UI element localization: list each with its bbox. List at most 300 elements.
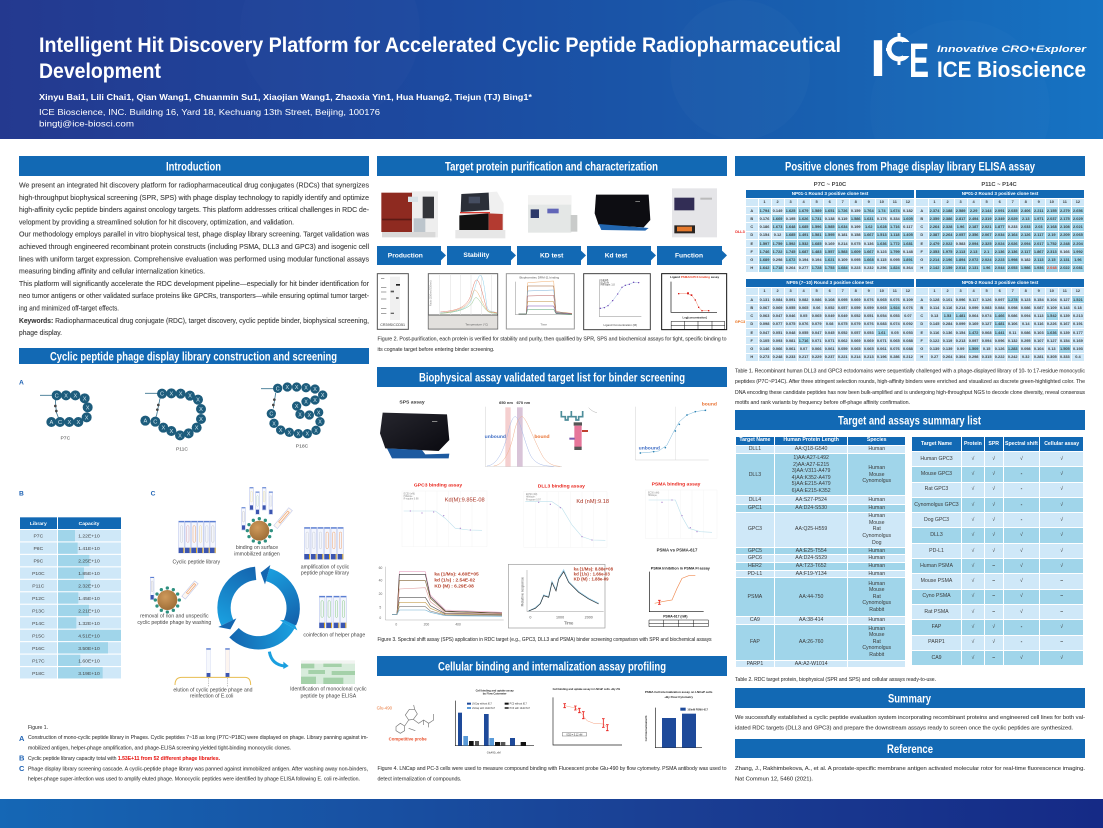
table: NP01-1 round 3: 1.794 [760, 208, 769, 213]
table: NP01-2 round 3: 5 [986, 199, 988, 204]
chart: DLL3 binding assay: EC50 (nM) [526, 494, 537, 496]
table: NP05-2 round 3: 0.333 [1060, 354, 1070, 359]
table: NP05 round 3: 0.06 [813, 305, 820, 310]
step: binding on surface: immobilized antigen [234, 551, 280, 557]
logo [870, 30, 1088, 88]
table: NP01-1 round 3: B [750, 216, 753, 221]
chart: SPR sensorgram GPC3: 60 [379, 566, 383, 570]
table: NP05 round 3: 0.048 [786, 330, 795, 335]
table: NP05 round 3: 0.07 [800, 346, 807, 351]
table: NP05 round 3: 11 [893, 288, 897, 293]
table: NP05-2 round 3: 0.167 [1060, 321, 1070, 326]
table: NP01-1 round 3: 0.123 [877, 249, 887, 254]
table: NP05 round 3: 0.08 [826, 321, 833, 326]
chart: binding bars: Glu490_nM [487, 750, 501, 754]
chart: titration curve [635, 402, 717, 460]
table: NP05 round 3: 0.055 [799, 330, 808, 335]
diagram: P18C: X [313, 398, 317, 404]
table: NP01-2 round 3: 2.656 [1073, 208, 1083, 213]
table: NP05-2 round 3: 0.305 [1047, 354, 1057, 359]
table: NP01-2 round 3: 2.1 [984, 249, 989, 254]
table: NP01-1 round 3: 1.745 [786, 249, 795, 254]
table: NP01-2 round 3: 2.155 [1047, 208, 1057, 213]
chart: thermal stability: Temperature (°C) [465, 323, 488, 327]
gel image [377, 274, 408, 329]
table: NP05 round 3: G [750, 346, 753, 351]
panel B: library capacity table: P14C [32, 621, 45, 627]
chart: SPR sensorgram GPC3: 0 [395, 622, 397, 626]
chart: SPR sensorgram GPC3: KD (M) : 6.29E-08 [434, 584, 474, 590]
table: NP05-2 round 3: 0.122 [930, 338, 939, 343]
section heading: positive clones [735, 156, 1085, 176]
table: NP01-2 round 3: 2.589 [956, 208, 965, 213]
table: NP01-1 round 3: E [750, 241, 753, 246]
table: NP01-2 round 3: 2 [946, 199, 949, 204]
table: NP05-2 round 3: NP05-2 Round 3 positive clone test [962, 280, 1038, 285]
table: NP01-1 round 3: 1.824 [890, 265, 900, 270]
affiliation: ICE Bioscience, INC. Building 16, Yard 18, Kechuang 13th Street, Beijing, 100176 [39, 107, 380, 117]
table: NP01-1 round 3: 0.334 [890, 216, 900, 221]
text block: reference: Nat Commun 12, 5460 (2021). [735, 776, 813, 782]
table: NP01-1 round 3: 1.772 [890, 241, 900, 246]
diagram: P18C: X [306, 432, 310, 438]
table: assay summary: √ [992, 624, 995, 630]
table: target list: AA:S27-P524 [795, 497, 827, 503]
chart: DLL3 binding assay: Hillslope [526, 497, 536, 499]
panel B: library capacity table: 1.45E+10 [78, 596, 100, 602]
table: NP01-1 round 3: 0.195 [786, 216, 795, 221]
table: NP05 round 3: 0.046 [786, 313, 795, 318]
table: NP05-2 round 3: 0.084 [995, 305, 1005, 310]
table: NP01-2 round 3: 2.021 [982, 224, 992, 229]
table: NP05 round 3: 0.221 [838, 354, 848, 359]
table: NP05-2 round 3: 0.114 [930, 305, 939, 310]
table: NP05 round 3: 0.053 [890, 313, 900, 318]
table: NP05-2 round 3: 0.143 [1060, 305, 1070, 310]
table: NP01-1 round 3: 1.685 [812, 241, 822, 246]
table: NP01-2 round 3: 2.223 [995, 257, 1005, 262]
table: NP01-2 round 3: 8 [1025, 199, 1027, 204]
table: NP05 round 3: 0.076 [799, 321, 808, 326]
table: assay summary: – [1060, 609, 1063, 615]
table: NP05 round 3: 0.055 [786, 305, 795, 310]
table: NP05-2 round 3: 8 [1025, 288, 1027, 293]
table: NP01-2 round 3: 7 [1012, 199, 1014, 204]
table: NP05 round 3: 0.047 [773, 313, 782, 318]
table: assay summary: √ [971, 486, 974, 492]
table: target list: Human [868, 513, 885, 519]
table: assay summary: √ [1060, 532, 1063, 538]
ELISA table group labels: DLL3 [735, 230, 745, 234]
table: NP01-2 round 3: 2.022 [943, 241, 952, 246]
table: NP01-2 round 3: 2.211 [1034, 208, 1044, 213]
table: NP05-2 round 3: 0.074 [982, 313, 992, 318]
table: NP01-1 round 3: 1.687 [799, 249, 808, 254]
table: NP01-2 round 3: 2.817 [956, 216, 965, 221]
panel C: phage screening cycle [137, 487, 367, 700]
table: NP05 round 3: 10 [880, 288, 884, 293]
chart: SPR sensorgram with single cycle: 1000 [556, 615, 564, 619]
caption: figure 1: Phage display library screening cascade. A cyclic-peptide phage library was panned against immobilized antigen. After washing away non-binders, [28, 766, 368, 772]
table: assay summary: √ [1060, 471, 1063, 477]
table: NP05 round 3: 0.075 [838, 321, 848, 326]
table: assay summary: DLL3 [930, 532, 943, 538]
table: NP05-2 round 3: B [920, 305, 923, 310]
table: assay summary: √ [1020, 456, 1023, 462]
step: cyclic peptide library [173, 521, 221, 566]
chart: dose response: EC50 fit [601, 281, 609, 284]
table: assay summary: √ [971, 548, 974, 554]
panel: purification workflow: Stability [463, 252, 490, 259]
chart: SPR sensorgram GPC3: kd (1/s) : 2.54E-02 [434, 578, 475, 584]
diagram: P11C: X [188, 394, 192, 400]
table: NP01-2 round 3: 2.065 [1073, 232, 1083, 237]
table: NP05 round 3: 0.076 [864, 297, 874, 302]
diagram: P18C: C [269, 412, 273, 418]
table: NP01-1 round 3: 0.109 [838, 257, 848, 262]
table: NP05 round 3: 0.075 [786, 321, 795, 326]
table: NP05-2 round 3: 0.264 [943, 354, 952, 359]
table: assay summary: √ [971, 609, 974, 615]
table: NP01-1 round 3: 1.609 [851, 249, 861, 254]
table: NP01-1 round 3: 1.891 [903, 257, 913, 262]
panel B: library capacity table [19, 491, 121, 678]
table: assay summary: - [1021, 486, 1022, 492]
table: NP01-1 round 3: D [750, 232, 753, 237]
table: NP05-2 round 3: 0.086 [1021, 305, 1031, 310]
table: NP01-1 round 3: 1.651 [825, 208, 835, 213]
table: NP01-2 round 3 [916, 190, 1084, 272]
table: target list: AA:38-414 [799, 617, 823, 623]
table: NP01-1 round 3: 0.199 [851, 224, 861, 229]
table: target list: FAP [750, 639, 760, 645]
table: NP01-1 round 3: 1.118 [890, 232, 900, 237]
table: NP05-2 round 3: 10 [1050, 288, 1054, 293]
chart: binding bars: LNCap without 617 [472, 703, 493, 706]
chart: DLL3 binding assay: DLL3 binding assay [538, 483, 585, 489]
table: NP05 round 3: 0.061 [877, 346, 887, 351]
table: NP01-2 round 3: 2.187 [969, 224, 978, 229]
table: NP01-2 round 3: 2.356 [969, 232, 978, 237]
table: NP05 round 3: 0.086 [812, 297, 822, 302]
table: NP05 round 3: 1 [763, 288, 766, 293]
table: NP01-1 round 3: 1 [763, 199, 766, 204]
caption: figure 1: B [19, 754, 25, 762]
table: NP01-2 round 3: 1.96 [1074, 257, 1082, 262]
table: NP05 round 3: 0.286 [890, 354, 900, 359]
table: NP01-1 round 3: 1.681 [903, 241, 913, 246]
table: NP05 round 3: 0.052 [838, 330, 848, 335]
table: NP01-2 round 3: 2.136 [995, 249, 1005, 254]
table: NP01-2 round 3: 0.182 [1021, 257, 1031, 262]
table: assay summary: Target Name [921, 441, 952, 447]
table: target list: GPC5 [748, 548, 762, 554]
table: NP05-2 round 3: H [920, 354, 923, 359]
table: assay summary: Human PSMA [920, 563, 953, 569]
table: NP05-2 round 3: 12 [1076, 288, 1080, 293]
section heading: Introduction [19, 156, 369, 176]
diagram: P7C: X [73, 393, 77, 399]
table: assay summary: SPR [988, 441, 999, 447]
text block: introduction: We present an integrated hit discovery platform for radiopharmaceutical drug conjugates (RDCs) that synergizes [19, 182, 370, 190]
logo: Innovative CRO+Explorer [937, 44, 1088, 55]
table: NP01-1 round 3: 1.672 [786, 257, 795, 262]
table: assay summary: Dog GPC3 [924, 517, 949, 523]
table: NP05-2 round 3: 6 [999, 288, 1001, 293]
diagram: P18C: X [318, 420, 322, 426]
table: NP05 round 3: 0.053 [903, 330, 913, 335]
table: NP05-2 round 3: 0.126 [982, 297, 992, 302]
table: NP01-2 round 3: B [920, 216, 923, 221]
table: NP01-1 round 3: 1.581 [812, 232, 822, 237]
table: NP01-1 round 3: 0.138 [825, 216, 835, 221]
table: NP05 round 3: B [750, 305, 753, 310]
table: target list: Rabbit [869, 652, 884, 658]
table: NP05-2 round 3: 0.222 [995, 354, 1005, 359]
chemical structure: competitive probe [377, 705, 434, 741]
table: NP01-2 round 3: 2.325 [982, 241, 992, 246]
table: NP01-2 round 3: 2.494 [969, 216, 978, 221]
step: phage ELISA plate: Identification of monoclonal cyclic [290, 687, 367, 693]
table: NP05 round 3: 2 [776, 288, 779, 293]
table: target list: 2)AA:A27-E215 [793, 462, 829, 468]
table: NP01-1 round 3: 0.256 [877, 265, 887, 270]
step: elution: reinfection of E.coli [190, 694, 233, 700]
table: NP01-2 round 3: 2.353 [930, 249, 939, 254]
chart: GPC3 binding assay: GPC3 binding assay [414, 483, 462, 489]
table: NP01-2 round 3: 2.113 [1034, 257, 1044, 262]
table: NP05 round 3: 0.071 [877, 338, 887, 343]
table: NP05-2 round 3: 0.106 [1008, 321, 1018, 326]
table: NP01-1 round 3: 1.673 [773, 224, 782, 229]
table: NP05-2 round 3: 0.139 [943, 346, 952, 351]
table: target list: Human [868, 497, 885, 503]
step: phage ELISA plate: peptide by phage ELISA [301, 693, 357, 699]
step: binding on surface [234, 487, 292, 557]
diagram: P7C: X [64, 393, 68, 399]
table: NP05 round 3: 0.088 [903, 346, 913, 351]
table: NP05-2 round 3: C [920, 313, 923, 318]
table: NP01-1 round 3: 0.149 [773, 208, 782, 213]
diagram: P18C: P18C [296, 444, 309, 450]
table: NP01-2 round 3: 2.319 [982, 216, 992, 221]
caption: table 2: Table 2. RDC target protein, biophysical (SPR and SPS) and cellular assays ready-to-use. [735, 677, 936, 683]
chart: PSMA inhibition: PSMA Inhibition in PSMA FI assay [651, 567, 711, 571]
table: NP01-2 round 3: 2.021 [1073, 224, 1083, 229]
panel B: library capacity table: P18C [32, 671, 45, 677]
diagram: P18C: X [308, 413, 312, 419]
table: NP01-1 round 3: 4 [803, 199, 805, 204]
panel B: library capacity table: 2.21E+10 [78, 608, 100, 614]
table: NP05 round 3: 0.061 [786, 346, 795, 351]
table: NP05-2 round 3: 0.099 [969, 305, 978, 310]
chart: spectral shift: 650 nm [499, 400, 513, 405]
table: NP05-2 round 3: 1.542 [1047, 313, 1057, 318]
table: assay summary: √ [971, 517, 974, 523]
table: NP05-2 round 3: 0.107 [1034, 338, 1044, 343]
table: NP05-2 round 3: 0.103 [1034, 330, 1044, 335]
caption: figure 1: helper-phage super-infection was used to amplify eluted phage. Monocyclic peptides were identified by phage ELISA following E. coli re-infection. [28, 777, 360, 783]
table: NP01-1 round 3: 0.12 [774, 232, 781, 237]
table: target list: GPC6 [748, 555, 762, 561]
table: NP01-1 round 3: 7 [842, 199, 844, 204]
chart: GPC3 binding assay: EC50 (nM) [404, 493, 415, 495]
diagram: P11C: X [199, 417, 203, 423]
table: NP05 round 3: 0.213 [864, 354, 874, 359]
diagram: P11C: X [169, 391, 173, 397]
table: NP05-2 round 3: 0.213 [1073, 313, 1083, 318]
chart: SPR sensorgram GPC3: 20 [379, 592, 383, 596]
chart: internalization bars: PSMA Cell internalization assay on LNCaP cells [645, 690, 713, 694]
table: NP05 round 3: 0.065 [877, 305, 887, 310]
table: NP05-2 round 3: 0.27 [931, 354, 938, 359]
table: NP05-2 round 3: 1.441 [995, 330, 1005, 335]
section heading: biophysical assay [377, 367, 727, 387]
chart: internalization bars: Cell Internalization% [644, 715, 648, 741]
arrow: to ELISA [269, 652, 289, 669]
table: NP05-2 round 3: 0.097 [969, 338, 978, 343]
table: NP01-2 round 3: 1.894 [956, 257, 965, 262]
table: NP01-2 round 3: 3 [959, 199, 962, 204]
section heading: summary [735, 688, 1085, 708]
panel B: library capacity table: Library [30, 521, 47, 527]
table: assay summary: √ [971, 655, 974, 661]
table: target list: Human [868, 617, 885, 623]
table: assay summary: – [1060, 593, 1063, 599]
caption: figure 1: C [19, 764, 25, 773]
chart: dose response: Kd(nM) [601, 280, 609, 282]
table: NP01-2 round 3: 2.03 [1035, 224, 1043, 229]
table: assay summary [912, 437, 1083, 665]
title: Intelligent Hit Discovery Platform for Accelerated Cyclic Peptide Radiopharmaceutical [39, 33, 841, 57]
table: NP01-1 round 3: 0.181 [838, 232, 848, 237]
table: target list: AA:T23-T652 [796, 563, 827, 569]
table: target list: AA:26-760 [799, 639, 823, 645]
table: NP05-2 round 3: 0.169 [969, 321, 978, 326]
table: NP01-2 round 3: 1.877 [995, 224, 1005, 229]
table: assay summary: PD-L1 [929, 548, 944, 554]
table: NP01-1 round 3: 1.728 [812, 265, 822, 270]
table: NP01-1 round 3: 1.589 [812, 208, 822, 213]
step: cyclic peptide library: Cyclic peptide library [173, 560, 221, 566]
section heading: summary: Summary [888, 692, 931, 706]
email: bingtj@ice-biosci.com [39, 118, 134, 128]
table: NP01-1 round 3: 1.684 [838, 265, 848, 270]
table: NP05 round 3: 3 [789, 288, 792, 293]
chart: PSMA inhibition: PSMA-617 (nM) [663, 614, 687, 618]
table: NP01-1 round 3: 1.605 [903, 216, 913, 221]
table: NP01-2 round 3: 9 [1038, 199, 1040, 204]
table: NP05-2 round 3: 0.177 [1073, 330, 1083, 335]
text block: introduction: ing and minimized off-target effects. [19, 306, 119, 312]
table: NP05-2 round 3: 0.139 [930, 346, 939, 351]
table: NP01-1 round 3: 0.194 [799, 257, 808, 262]
table: NP01-2 round 3: 2.406 [1021, 208, 1031, 213]
table: assay summary: √ [1060, 486, 1063, 492]
caption: figure 1: Figure 1. [28, 725, 48, 731]
diagram: P11C: A [143, 419, 147, 425]
table: NP05-2 round 3: 0.281 [1034, 354, 1044, 359]
table: NP05 round 3: 5 [816, 288, 818, 293]
text block: introduction [19, 182, 370, 337]
diagram: P7C: P7C [60, 435, 71, 441]
diagram: P7C: X [86, 405, 90, 411]
table: assay summary: Protein [964, 441, 982, 447]
diagram: P18C: X [297, 432, 301, 438]
chart: dose response [584, 274, 650, 330]
table: assay summary: – [992, 655, 995, 661]
table: NP05 round 3: F [751, 338, 753, 343]
table: NP01-2 round 3: 2.13 [1022, 216, 1030, 221]
instrument: Kd test [595, 195, 650, 231]
panel B: library capacity table: 2.32E+10 [78, 584, 100, 590]
table: NP05 round 3: 0.07 [904, 313, 912, 318]
table: assay summary: - [1021, 502, 1022, 508]
caption: figure 2 [378, 336, 726, 353]
table: NP01-1 round 3: 1.722 [773, 249, 782, 254]
table: NP05-2 round 3: 0.101 [943, 297, 952, 302]
section heading: target and assays [735, 410, 1085, 430]
table: NP01-2 round 3: 2.264 [930, 224, 939, 229]
ELISA table group labels: P11C ~ P14C [981, 182, 1017, 188]
footer band [0, 799, 1103, 828]
table: NP01-1 round 3: 1.405 [903, 232, 913, 237]
caption: table 1: motifs and rank variants by frequency before off-phage affinity confirmation. [735, 400, 910, 406]
table: NP01-2 round 3: 1.96 [957, 224, 964, 229]
chart: binding bars: Cell binding and uptake assay [476, 689, 514, 693]
table: NP05-2 round 3: 0.139 [1060, 313, 1070, 318]
table: NP01-2 round 3: 2.094 [969, 241, 978, 246]
table: NP05-2 round 3: 0.4 [1075, 354, 1081, 359]
table: NP05-2 round 3: 0.14 [1022, 321, 1030, 326]
table: NP05 round 3: 0.088 [903, 338, 913, 343]
table: NP01-2 round 3: 1.752 [1047, 241, 1057, 246]
table: NP05-2 round 3: 1.521 [1073, 297, 1083, 302]
table: assay summary: - [1021, 517, 1022, 523]
ELISA table group labels: GPC3 [735, 320, 745, 324]
table: NP05-2 round 3: E [920, 330, 923, 335]
diagram: P11C: X [161, 426, 165, 432]
table: NP05-2 round 3: 0.126 [995, 346, 1005, 351]
table: NP01-2 round 3: 2.033 [1021, 224, 1031, 229]
caption: table 1 [735, 368, 1085, 406]
table: assay summary: – [992, 578, 995, 584]
table: NP05-2 round 3: 0.169 [1073, 338, 1083, 343]
table: assay summary: – [992, 563, 995, 569]
logo: I [870, 30, 886, 88]
table: NP05 round 3: 0.248 [773, 354, 782, 359]
caption: figure 4: detect internalization of compounds. [378, 777, 462, 783]
table: NP01-1 round 3: 0.232 [864, 265, 874, 270]
diagram: P11C: C [153, 420, 157, 426]
table: NP01-1 round 3: 1.648 [786, 224, 795, 229]
table: NP01-1 round 3: 0.148 [903, 249, 913, 254]
table: NP05-2 round 3: 0.127 [1047, 338, 1057, 343]
table: NP01-1 round 3: 1.596 [812, 224, 822, 229]
text block: introduction: Our methodology employs parallel in vitro biophysical test, phage display library screening. Target validation was [19, 232, 369, 239]
table: NP05 round 3: 0.065 [877, 297, 887, 302]
table: NP05 round 3: 0.067 [760, 305, 769, 310]
chart: SPR sensorgram with single cycle: Time [564, 620, 574, 625]
table: target list: Rabbit [869, 607, 884, 613]
table: target list: Target Name [739, 437, 770, 443]
table: NP01-1 round 3: 0.075 [851, 241, 861, 246]
table: target list: PARP1 [747, 661, 763, 667]
table: NP05 round 3: 0.05 [800, 313, 807, 318]
table: NP01-1 round 3: 1.583 [838, 249, 848, 254]
table: target list: DLL4 [749, 497, 761, 503]
table: assay summary: Cellular assay [1044, 441, 1079, 447]
